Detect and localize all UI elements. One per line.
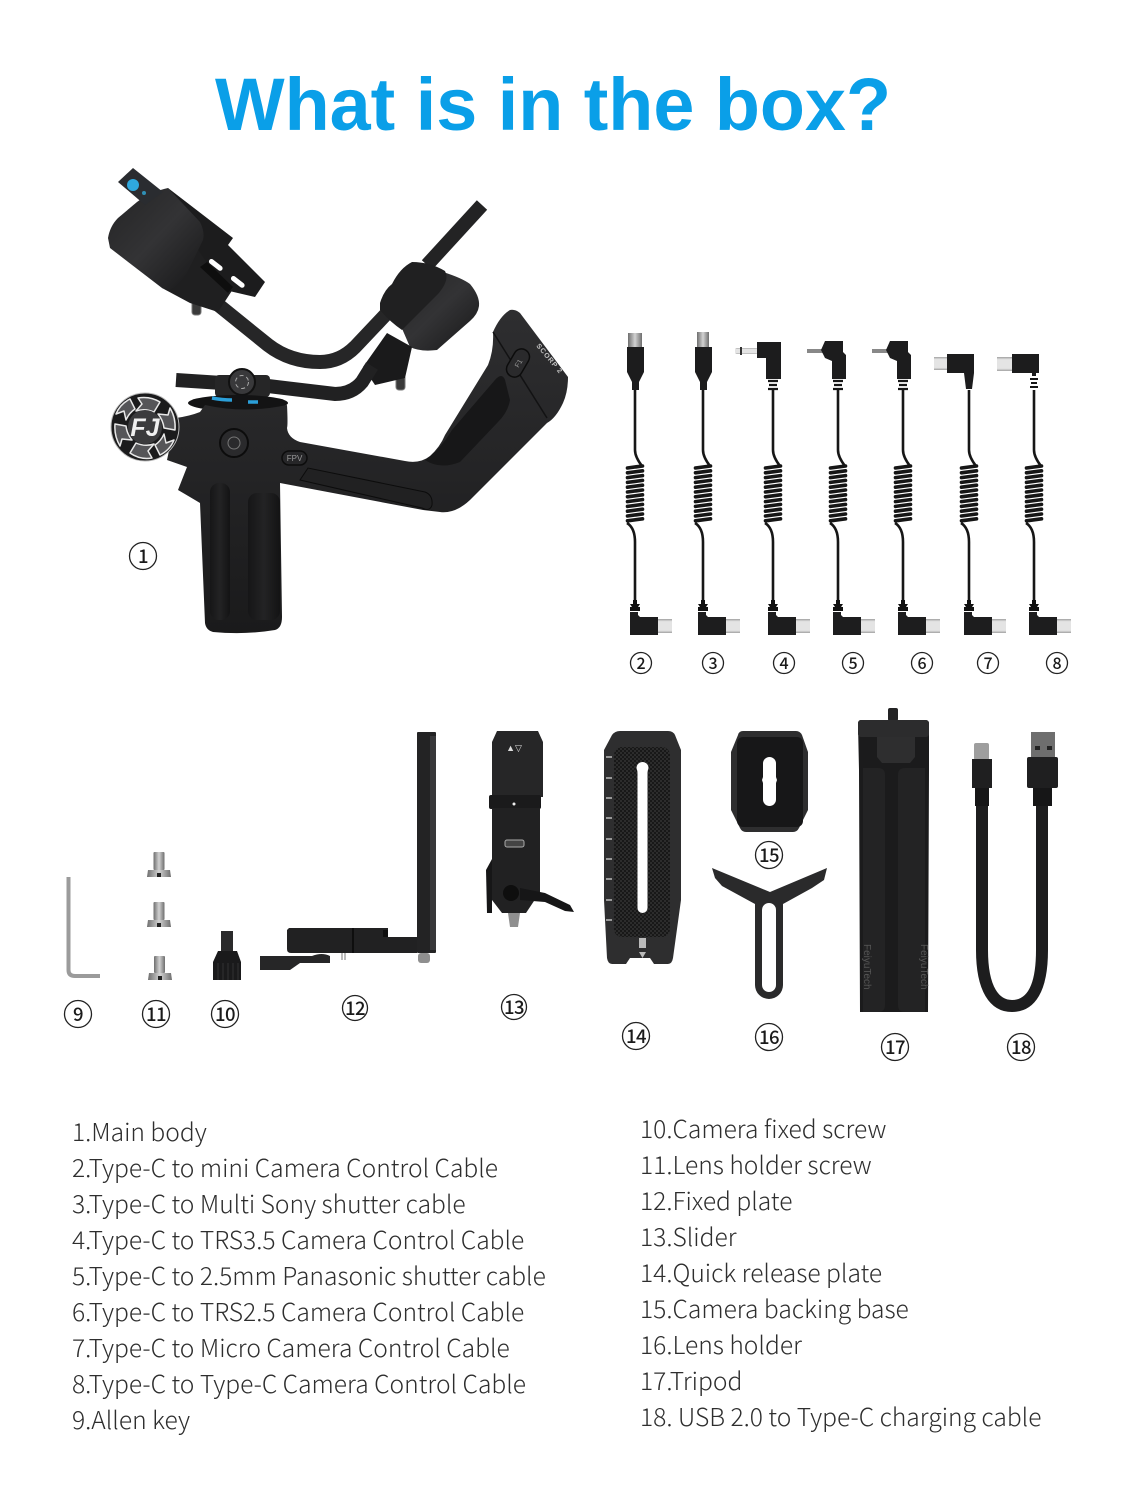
mode button <box>220 429 248 457</box>
top display cap <box>118 168 163 205</box>
parts list: left column: 8.Type-C to Type-C Camera Control Cable <box>72 1365 526 1401</box>
counterweight dial: FJ <box>130 414 161 442</box>
item 13: slider <box>486 731 574 927</box>
label 15: 15 <box>759 842 779 868</box>
title: What is in the box? <box>215 63 891 146</box>
parts list: left column: 4.Type-C to TRS3.5 Camera Control Cable <box>72 1221 524 1257</box>
parts list: right column: 15.Camera backing base <box>640 1290 909 1326</box>
F1 button <box>504 346 532 380</box>
FPV button: FPV <box>287 454 303 463</box>
label 5 <box>842 650 864 674</box>
parts list: left column: 2.Type-C to mini Camera Control Cable <box>72 1149 498 1185</box>
item 11: lens holder screws <box>147 852 172 980</box>
item 13: slider: ▲▽ <box>506 743 522 753</box>
parts list: right column: 12.Fixed plate <box>640 1182 792 1218</box>
label 1 <box>130 542 156 570</box>
label 2 <box>630 650 652 674</box>
parts list: right column: 11.Lens holder screw <box>640 1146 872 1182</box>
parts list: right column: 18. USB 2.0 to Type-C charging cable <box>640 1398 1041 1434</box>
top motor plate <box>168 188 265 297</box>
label 9 <box>64 1000 92 1028</box>
label 7: 7 <box>983 650 993 674</box>
side slot panel <box>300 468 432 509</box>
label 3: 3 <box>708 650 718 674</box>
cable 6: TRS2.5 <box>872 341 940 635</box>
item 17: tripod: FeiyuTech <box>918 944 929 990</box>
lower mount tab <box>396 375 405 390</box>
item 16: lens holder <box>712 868 827 999</box>
blue ring <box>188 395 288 411</box>
handle end face edge <box>493 332 547 418</box>
label 16: 16 <box>759 1024 779 1050</box>
label 8: 8 <box>1052 650 1062 674</box>
item 17: tripod: FeiyuTech <box>861 944 872 990</box>
label 5: 5 <box>848 650 858 674</box>
right motor lower bracket <box>363 333 412 385</box>
parts list: left column: 3.Type-C to Multi Sony shutter cable <box>72 1185 466 1221</box>
body shell <box>167 310 568 633</box>
label 1: 1 <box>138 543 148 569</box>
cable 3: multi <box>695 332 740 635</box>
upper curved arm <box>216 303 390 362</box>
label 7 <box>978 650 998 674</box>
upper arm handle <box>427 205 482 265</box>
parts list: left column: 6.Type-C to TRS2.5 Camera Control Cable <box>72 1293 524 1329</box>
cable 8: Type-C <box>997 354 1071 635</box>
top mount tab <box>192 300 201 315</box>
handle grip panel <box>425 376 510 466</box>
parts list: right column <box>640 1110 1041 1434</box>
parts list: left column: 7.Type-C to Micro Camera Control Cable <box>72 1329 510 1365</box>
label 6: 6 <box>917 650 927 674</box>
pistol grip panels <box>210 483 280 620</box>
label 9: 9 <box>73 1001 83 1027</box>
F1 button: F1 <box>514 358 524 369</box>
parts list: left column: 5.Type-C to 2.5mm Panasonic shutter cable <box>72 1257 546 1293</box>
right motor <box>397 272 479 351</box>
cable 7: Micro <box>934 354 1006 635</box>
label 17: 17 <box>885 1034 905 1060</box>
item 10: camera fixed screw <box>213 931 241 980</box>
item 9: allen key <box>68 877 100 976</box>
label 12: 12 <box>345 995 365 1021</box>
parts list: left column <box>72 1113 546 1437</box>
top motor <box>108 188 204 290</box>
parts list: left column: 1.Main body <box>72 1113 207 1149</box>
item 18: USB to Type-C cable <box>972 732 1058 1006</box>
label 4: 4 <box>779 650 789 674</box>
gimbal main body <box>108 168 568 633</box>
parts list: left column: 9.Allen key <box>72 1401 190 1437</box>
label 14: 14 <box>626 1023 646 1049</box>
cable 4: TRS3.5 <box>735 342 810 635</box>
item 12: fixed plate <box>260 732 436 970</box>
lower curved arm <box>176 366 372 394</box>
parts list: right column: 10.Camera fixed screw <box>640 1110 887 1146</box>
parts list: right column: 13.Slider <box>640 1218 737 1254</box>
item 14: quick release plate <box>604 731 681 964</box>
brand text: SCORP 2 <box>534 343 563 375</box>
tilt knob and base <box>215 369 270 397</box>
label 4 <box>774 650 794 674</box>
item 17: tripod <box>858 708 929 1012</box>
counterweight dial <box>111 393 179 461</box>
parts list: right column: 16.Lens holder <box>640 1326 802 1362</box>
label 11: 11 <box>146 1001 166 1027</box>
cable 5: 2.5mm <box>807 341 875 635</box>
item 15: camera backing base <box>731 731 808 832</box>
label 18: 18 <box>1011 1034 1031 1060</box>
top motor bracket <box>162 240 237 312</box>
label 13: 13 <box>504 994 524 1020</box>
label 10: 10 <box>215 1001 235 1027</box>
label 2: 2 <box>636 650 646 674</box>
FPV button <box>282 451 307 465</box>
label 8 <box>1046 650 1068 674</box>
parts list: right column: 17.Tripod <box>640 1362 742 1398</box>
right motor ring <box>380 262 446 330</box>
label 6 <box>912 650 932 674</box>
label 3 <box>702 650 724 674</box>
parts list: right column: 14.Quick release plate <box>640 1254 882 1290</box>
cable 2: mini <box>627 333 672 635</box>
